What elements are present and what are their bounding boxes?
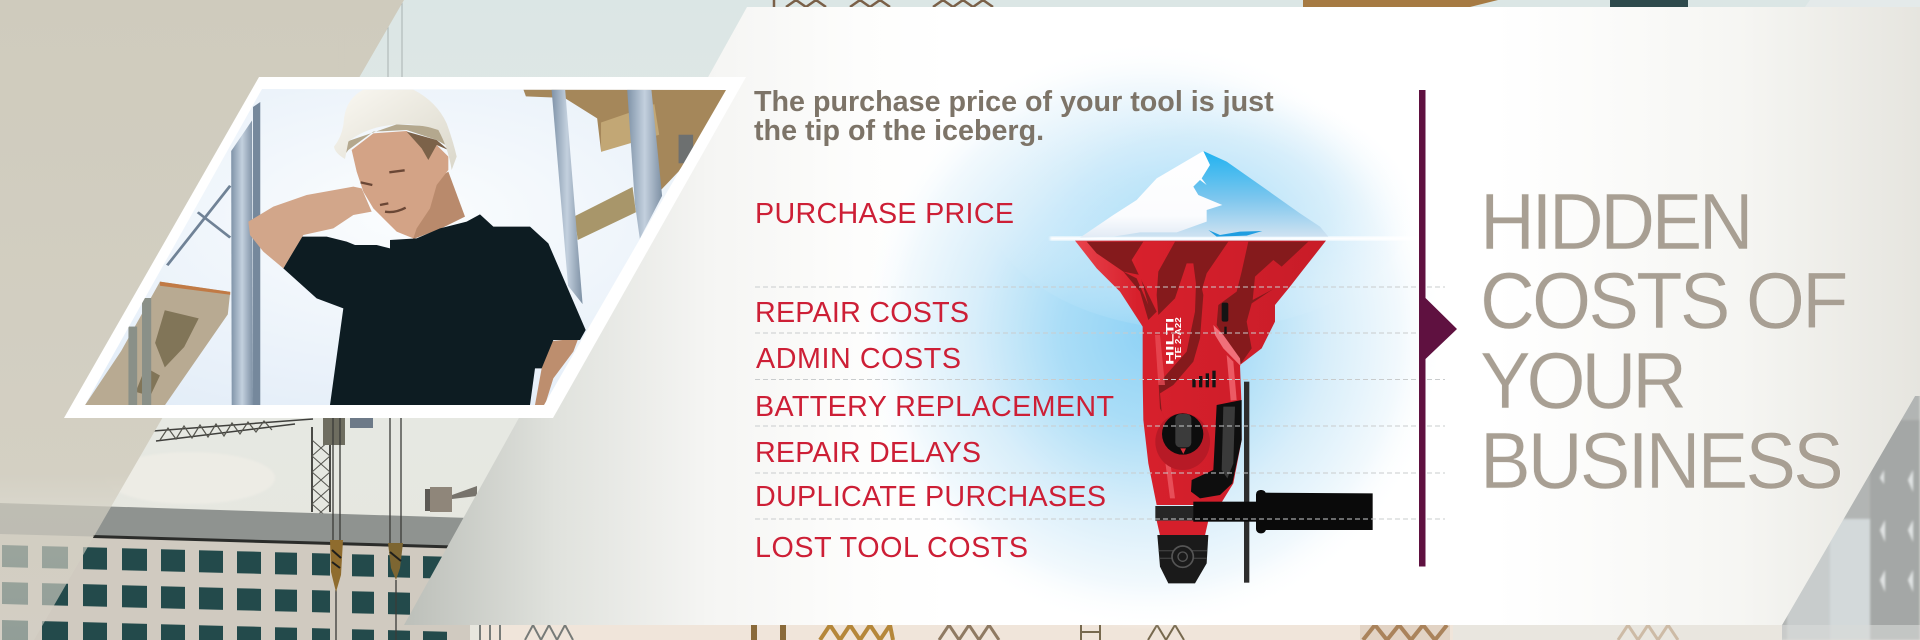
- dashed row dividers: [755, 287, 1445, 519]
- beige translucent panel at left: [0, 0, 404, 640]
- dark rock facets: [1087, 242, 1308, 422]
- title: BUSINESS: [1480, 415, 1844, 505]
- neck: [407, 172, 465, 239]
- collar: [1155, 506, 1195, 521]
- background: cloud: [105, 452, 275, 504]
- duplicate purchases label: DUPLICATE PURCHASES: [755, 481, 1106, 513]
- iceberg tip, blue side: [1097, 151, 1328, 237]
- panel: main white content panel: [404, 7, 1920, 630]
- left scaffold poles: [231, 102, 260, 405]
- battery replacement label: BATTERY REPLACEMENT: [755, 391, 1114, 423]
- grey translucent photo corner at right: [1782, 396, 1920, 640]
- hair: [407, 132, 448, 160]
- repair costs label: REPAIR COSTS: [755, 297, 969, 329]
- pink highlights: [1213, 325, 1241, 366]
- title: HIDDEN: [1480, 176, 1754, 266]
- iceberg tip, white side: [1080, 151, 1222, 238]
- lost tool costs label: LOST TOOL COSTS: [755, 532, 1028, 564]
- repair delays label: REPAIR DELAYS: [755, 437, 981, 469]
- illustration: iceberg and red drill: [1075, 151, 1373, 583]
- black trigger grip: [1191, 400, 1242, 498]
- heading: tip of the iceberg: The purchase price of your tool is just: [754, 86, 1274, 118]
- admin costs label: ADMIN COSTS: [756, 343, 961, 375]
- red neck: [1157, 521, 1208, 535]
- face: [352, 131, 448, 238]
- chuck: [1157, 535, 1208, 583]
- purchase price label: PURCHASE PRICE: [755, 198, 1014, 230]
- background: top strip of cranes: [774, 0, 1920, 7]
- left scaffold diagonal: [167, 186, 230, 265]
- label: HILTI brand: HILTI: [1165, 318, 1177, 365]
- side handle rod: [1244, 382, 1249, 583]
- divider bar with arrow: [1419, 90, 1457, 566]
- red crack in rock: [1123, 272, 1148, 305]
- background: tower crane: [153, 418, 373, 520]
- background: building: [0, 503, 470, 640]
- drill and submerged iceberg body: [1075, 241, 1326, 505]
- iceberg top glow: [985, 70, 1415, 330]
- label: HILTI brand: TE 2-A22: [1174, 317, 1183, 359]
- background: crane cables and hooks: [330, 0, 403, 640]
- title: COSTS OF: [1480, 255, 1849, 345]
- heading: tip of the iceberg: [754, 86, 1274, 147]
- hard hat: [334, 90, 457, 170]
- heading: tip of the iceberg: the tip of the iceberg.: [754, 115, 1044, 147]
- list of costs: [755, 198, 1114, 564]
- concrete skip: [85, 282, 230, 405]
- iceberg ice streak: [1208, 230, 1262, 237]
- right scaffold timber: [523, 90, 727, 240]
- photo sky: [82, 88, 732, 408]
- vents and slots: [1192, 303, 1228, 387]
- background: second crane: [425, 486, 477, 512]
- hat band: [346, 124, 446, 153]
- facial features: [361, 170, 406, 212]
- title: [1480, 176, 1849, 505]
- raised arm: [248, 187, 372, 268]
- title: YOUR: [1480, 335, 1687, 425]
- right scaffold poles: [552, 90, 662, 304]
- black polo shirt: [283, 214, 586, 405]
- iceberg glow: [855, 40, 1445, 630]
- worker figure: [248, 90, 586, 405]
- right arm: [535, 338, 578, 405]
- label: HILTI brand: [1165, 317, 1183, 365]
- waterline: [1050, 236, 1422, 240]
- background: bottom strip of cranes: [480, 625, 1920, 640]
- photo frame: worried construction worker: [64, 77, 746, 418]
- selector knob: [1155, 413, 1210, 470]
- side handle: [1193, 490, 1373, 533]
